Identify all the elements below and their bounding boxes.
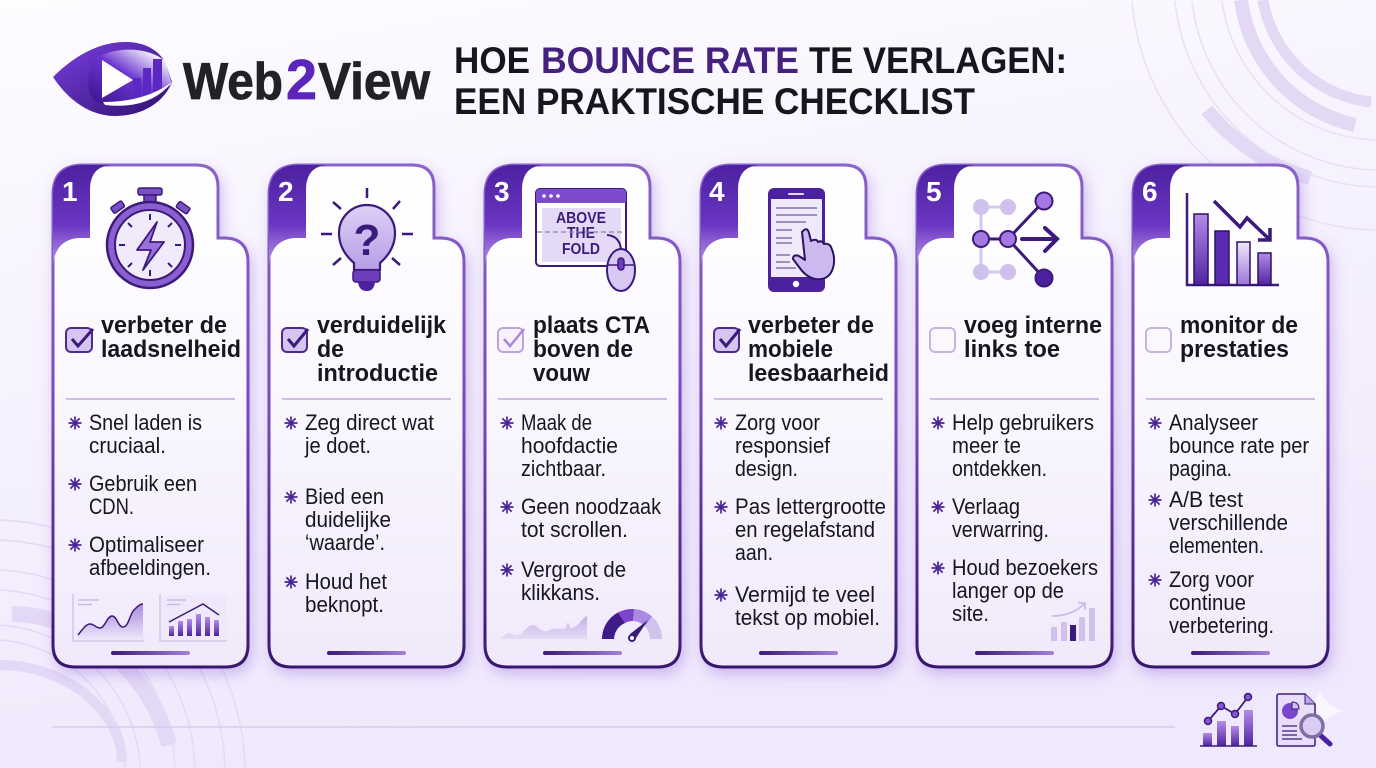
bullet list: zichtbaar. [521, 456, 606, 481]
bullet list: Geen noodzaak [521, 494, 662, 519]
heading: verduidelijk [317, 312, 447, 339]
icon: above the fold browser with mouse: ABOVE [556, 210, 606, 227]
bullet list: site. [952, 601, 989, 626]
icon: above the fold browser with mouse: FOLD [562, 241, 600, 258]
panel: card 2 verduidelijk de introductie [269, 165, 464, 667]
panel: card 6 monitor de prestaties [1133, 165, 1328, 667]
bullet list: design. [735, 456, 798, 481]
bullet list: Pas lettergrootte [735, 494, 886, 519]
heading [964, 312, 1102, 363]
icon: stopwatch with lightning [107, 188, 193, 288]
heading: introductie [317, 360, 438, 387]
icon: link network with arrow [973, 192, 1057, 286]
bullet list: tot scrollen. [521, 517, 628, 542]
bullet list: ontdekken. [952, 456, 1047, 481]
bullet list [714, 410, 886, 630]
checkbox checked [66, 328, 93, 352]
bullet list: pagina. [1169, 456, 1232, 481]
checkbox lightly checked [498, 328, 524, 352]
panel: card 4 verbeter de mobiele leesbaarheid [701, 165, 896, 667]
bullet list: Vermijd te veel [735, 582, 875, 607]
number 4: 4 [709, 176, 725, 207]
panel: card 5 voeg interne links toe [917, 165, 1112, 667]
bullet list: langer op de [952, 578, 1064, 603]
wordmark: Web [183, 53, 283, 111]
bullet list [932, 410, 1098, 626]
wordmark: View [318, 53, 431, 111]
bullet list: Houd bezoekers [952, 555, 1098, 580]
heading [1180, 312, 1298, 363]
bullet list: verbetering. [1169, 613, 1274, 638]
bullet list: afbeeldingen. [89, 555, 211, 580]
bullet list: en regelafstand [735, 517, 875, 542]
bullet list: Optimaliseer [89, 532, 204, 557]
heading: verbeter de [101, 312, 227, 339]
checkbox empty [930, 328, 955, 352]
heading: laadsnelheid [101, 336, 241, 363]
title: TE VERLAGEN: [809, 40, 1067, 81]
bullet list: Verlaag [952, 494, 1020, 519]
bullet list: duidelijke [305, 507, 391, 532]
bullet list: aan. [735, 540, 773, 565]
heading: leesbaarheid [748, 360, 889, 387]
bullet list [1148, 410, 1309, 638]
heading [317, 312, 447, 387]
icon: light bulb with question mark [321, 188, 413, 291]
wordmark: 2 [286, 48, 317, 112]
bullet list: responsief [735, 433, 831, 458]
heading: de [317, 336, 344, 363]
heading: monitor de [1180, 312, 1298, 339]
heading: verbeter de [748, 312, 874, 339]
bullet list: verschillende [1169, 510, 1288, 535]
bullet list [500, 410, 662, 605]
bullet list: ‘waarde’. [305, 530, 385, 555]
bullet list: CDN. [89, 494, 134, 519]
heading: plaats CTA [533, 312, 650, 339]
bullet list: beknopt. [305, 592, 384, 617]
bullet list: cruciaal. [89, 433, 166, 458]
mini chart: growth bars [1051, 603, 1095, 641]
bullet list: Zorg voor [1169, 567, 1254, 592]
checkbox checked [282, 328, 308, 352]
heading: mobiele [748, 336, 833, 363]
icon: sparkle [1298, 688, 1344, 730]
bullet list: Vergroot de [521, 557, 626, 582]
panel: card 3 plaats CTA boven de vouw [485, 165, 680, 667]
panel: card 1 verbeter de laadsnelheid [53, 165, 248, 667]
title: EEN PRAKTISCHE CHECKLIST [454, 81, 975, 122]
heading: voeg interne [964, 312, 1102, 339]
icon: above the fold browser with mouse [536, 189, 635, 291]
checkbox checked [714, 328, 740, 352]
mini gauge [602, 609, 662, 641]
bullet list: Snel laden is [89, 410, 202, 435]
icon: bar and line chart [1200, 694, 1257, 746]
number 5: 5 [926, 176, 942, 207]
bullet list: je doet. [304, 433, 371, 458]
icon: eye with play button and bars [53, 42, 172, 116]
title: HOE [454, 40, 530, 81]
bullet list: Zeg direct wat [305, 410, 434, 435]
icon: phone with pointing hand [768, 188, 834, 292]
bullet list [284, 410, 434, 617]
wordmark [183, 48, 431, 112]
number 6: 6 [1142, 176, 1158, 207]
bullet list: hoofdactie [521, 433, 618, 458]
icon: report with magnifier [1277, 694, 1330, 746]
bullet list: continue [1169, 590, 1246, 615]
checkbox empty [1146, 328, 1171, 352]
bullet list: Analyseer [1169, 410, 1258, 435]
heading [533, 312, 650, 387]
icon: light bulb with question mark: ? [354, 216, 380, 265]
bullet list: Houd het [305, 569, 387, 594]
bullet list: Gebruik een [89, 471, 197, 496]
bullet list: Maak de [521, 410, 592, 435]
number 2: 2 [278, 176, 294, 207]
bullet list: Zorg voor [735, 410, 820, 435]
mini chart: line area [73, 594, 144, 641]
bullet list: Help gebruikers [952, 410, 1094, 435]
mini chart: sparkline [501, 615, 587, 639]
bullet list: tekst op mobiel. [735, 605, 880, 630]
title: BOUNCE RATE [541, 40, 799, 81]
logo: Web2View [53, 42, 431, 116]
icon: declining bar chart [1187, 193, 1279, 285]
heading: vouw [533, 360, 590, 387]
bullet list [68, 410, 211, 580]
heading [101, 312, 241, 363]
bullet list: elementen. [1169, 533, 1264, 558]
bullet list: meer te [952, 433, 1021, 458]
mini chart: bars and line [160, 594, 227, 641]
icon: above the fold browser with mouse: THE [567, 225, 595, 242]
number 1: 1 [62, 176, 78, 207]
heading: prestaties [1180, 336, 1289, 363]
bullet list: verwarring. [952, 517, 1049, 542]
title [454, 40, 1067, 122]
bullet list: klikkans. [521, 580, 600, 605]
number 3: 3 [494, 176, 510, 207]
bullet list: bounce rate per [1169, 433, 1309, 458]
bullet list: Bied een [305, 484, 384, 509]
heading: links toe [964, 336, 1060, 363]
heading [748, 312, 889, 387]
bullet list: A/B test [1169, 487, 1243, 512]
heading: boven de [533, 336, 633, 363]
